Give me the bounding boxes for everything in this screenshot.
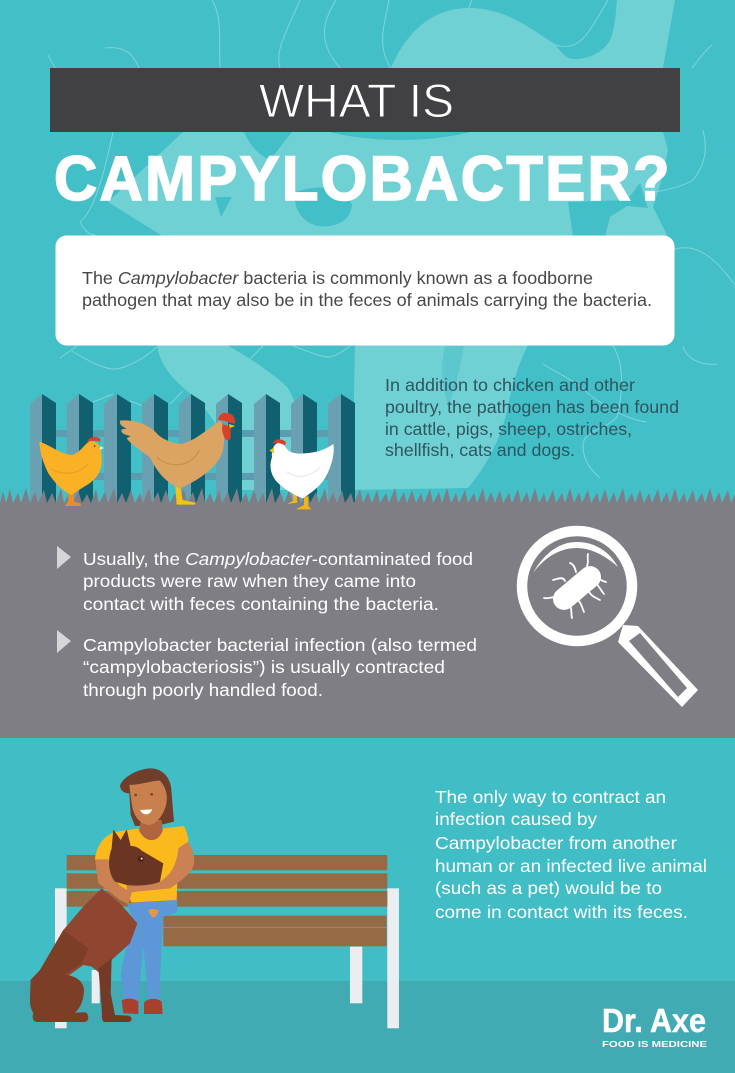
- text: animals carrying pathogen: poultry, the pathogen has been found: [385, 397, 679, 417]
- text: contracting infection: come in contact with its feces.: [435, 902, 688, 922]
- intro text: The Campylobacter bacteria is commonly known as a foodborne: [82, 268, 593, 288]
- pale tube below white box, right: [352, 345, 528, 490]
- woman: [95, 768, 188, 1014]
- text: animals carrying pathogen: In addition to chicken and other: [385, 375, 635, 395]
- bullet text 2: Campylobacter bacterial infection (also termed: [83, 635, 477, 655]
- intro text: [82, 268, 652, 310]
- heading: WHAT IS: WHAT IS: [259, 75, 454, 128]
- text: contracting infection: Campylobacter from another: [435, 833, 677, 853]
- logo: Dr. Axe: Dr. Axe: [602, 1002, 706, 1039]
- bullet text 2: through poorly handled food.: [83, 680, 323, 700]
- text: animals carrying pathogen: shellfish, cats and dogs.: [385, 440, 575, 460]
- bullet text 1: Usually, the Campylobacter -contaminated food: [83, 549, 473, 569]
- text: contracting infection: infection caused by: [435, 809, 597, 829]
- woman's arms hugging dog: [95, 842, 194, 904]
- text: contracting infection: human or an infected live animal: [435, 856, 707, 876]
- illustration: woman with dog on bench: [30, 768, 399, 1028]
- heading: CAMPYLOBACTER?: CAMPYLOBACTER?: [54, 144, 670, 214]
- bullet arrow 1: [57, 546, 71, 569]
- bullet text 1: contact with feces containing the bacteria.: [83, 594, 439, 614]
- bacterium: [544, 554, 606, 618]
- dog head: [109, 829, 163, 886]
- panel: grey section with grass edge: [0, 488, 735, 738]
- text: contracting infection: The only way to contract an: [435, 787, 666, 807]
- bullet text 2: “campylobacteriosis”) is usually contracted: [83, 657, 445, 677]
- icon: magnifying glass with bacterium: [522, 531, 698, 707]
- illustration: fence: [30, 394, 355, 505]
- bullet 1: [57, 546, 473, 614]
- illustration: rooster: [120, 413, 235, 505]
- logo: Dr. Axe: FOOD IS MEDICINE: [602, 1039, 707, 1049]
- bullet text 1: products were raw when they came into: [83, 571, 416, 591]
- panel: bottom teal section: [0, 738, 735, 1073]
- dog body: [30, 888, 137, 1022]
- bullet text 1: [83, 549, 473, 614]
- heading bar: [50, 68, 680, 132]
- bullet arrow 2: [57, 630, 71, 653]
- text: animals carrying pathogen: [385, 375, 679, 460]
- panel: intro callout: [56, 236, 674, 346]
- large pale bacteria body: [108, 0, 675, 237]
- text: contracting infection: [435, 787, 707, 922]
- panel: top teal background with bacteria shapes: [0, 0, 735, 510]
- intro text: pathogen that may also be in the feces of animals carrying the bacteria.: [82, 290, 652, 310]
- pale tube below white box, left: [157, 345, 305, 490]
- bullet text 2: [83, 635, 477, 700]
- thin flagella lines: [48, 0, 735, 478]
- text: animals carrying pathogen: in cattle, pigs, sheep, ostriches,: [385, 419, 632, 439]
- notches in pale body: [244, 132, 292, 160]
- illustration: yellow hen: [39, 437, 104, 506]
- text: contracting infection: (such as a pet) would be to: [435, 878, 662, 898]
- bullet 2: [57, 630, 477, 700]
- illustration: white hen: [269, 439, 334, 509]
- bench: [55, 855, 399, 1028]
